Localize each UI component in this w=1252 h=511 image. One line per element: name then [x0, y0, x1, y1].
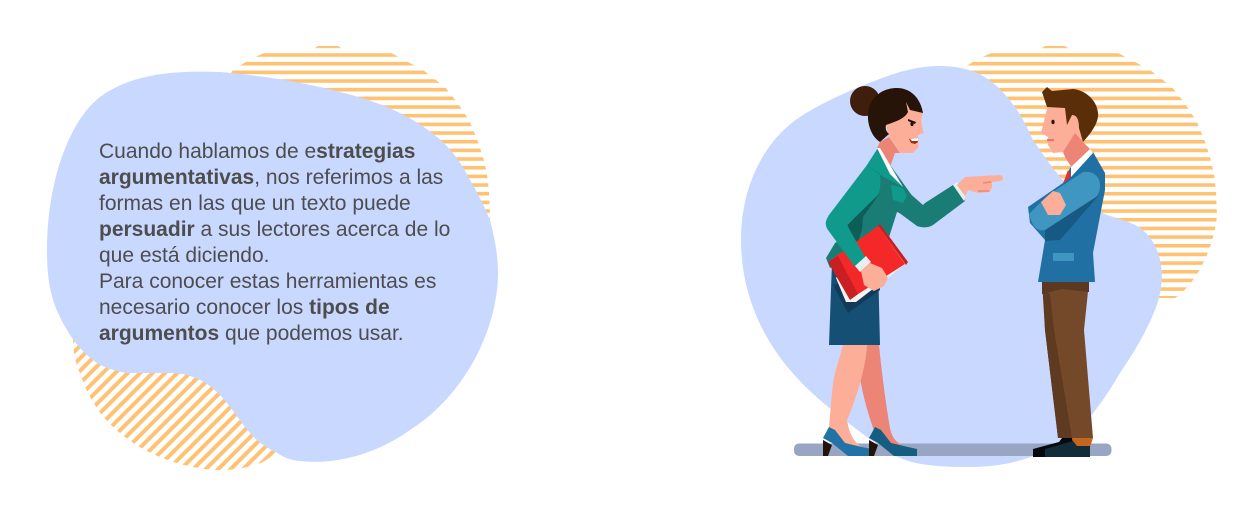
- text block: Para conocer estas herramientas es: [99, 270, 436, 293]
- woman skirt: [829, 262, 880, 345]
- left striped blob top: [200, 46, 490, 300]
- woman lapel: [867, 148, 903, 187]
- left striped blob bottom: [73, 330, 300, 470]
- right blue blob: [741, 66, 1162, 467]
- ground shadow: [794, 444, 1112, 456]
- woman jacket body: [826, 148, 915, 268]
- man pocket: [1053, 253, 1074, 261]
- man collar: [1071, 149, 1093, 177]
- man figure: [1028, 87, 1105, 457]
- woman cuff: [953, 182, 965, 201]
- man neck: [1063, 133, 1091, 168]
- woman pointing arm: [898, 185, 965, 227]
- book shadow on skirt: [833, 272, 880, 313]
- left blue blob: [47, 72, 498, 462]
- woman front arm: [826, 165, 880, 267]
- text block: Cuando hablamos de estrategias: [99, 140, 415, 163]
- man tie: [1063, 170, 1071, 184]
- woman finger lines: [978, 182, 991, 191]
- text block: [99, 140, 450, 345]
- man jacket shadow: [1045, 195, 1099, 241]
- man face: [1041, 105, 1083, 153]
- text block: persuadir a sus lectores acerca de lo: [99, 218, 450, 241]
- woman face: [886, 102, 924, 153]
- woman front hand: [861, 263, 888, 291]
- woman mouth: [909, 138, 918, 144]
- man jacket: [1028, 152, 1105, 282]
- text block: necesario conocer los tipos de: [99, 296, 390, 319]
- man hand: [1041, 191, 1066, 215]
- woman front cuff: [855, 256, 871, 272]
- text block: argumentos que podemos usar.: [99, 322, 404, 345]
- man eye: [1051, 120, 1055, 124]
- man hair: [1042, 87, 1098, 142]
- woman hair: [868, 88, 923, 142]
- woman figure: [823, 86, 1003, 456]
- right striped blob: [927, 46, 1217, 298]
- woman eye: [910, 122, 914, 126]
- woman hair bun: [850, 86, 880, 116]
- man sleeve: [1029, 172, 1100, 230]
- woman book: [828, 224, 908, 302]
- man trousers: [1042, 282, 1093, 438]
- woman neck: [877, 137, 900, 173]
- man shoes: [1033, 438, 1093, 457]
- woman legs: [829, 345, 907, 450]
- man mouth: [1047, 139, 1054, 141]
- woman pointing hand: [957, 175, 1003, 196]
- text block: argumentativas, nos referimos a las: [99, 166, 443, 189]
- text block: que está diciendo.: [99, 244, 269, 267]
- text block: formas en las que un texto puede: [99, 192, 411, 215]
- woman brow: [908, 119, 916, 124]
- woman body shadow: [847, 193, 880, 245]
- woman shoes: [823, 427, 917, 456]
